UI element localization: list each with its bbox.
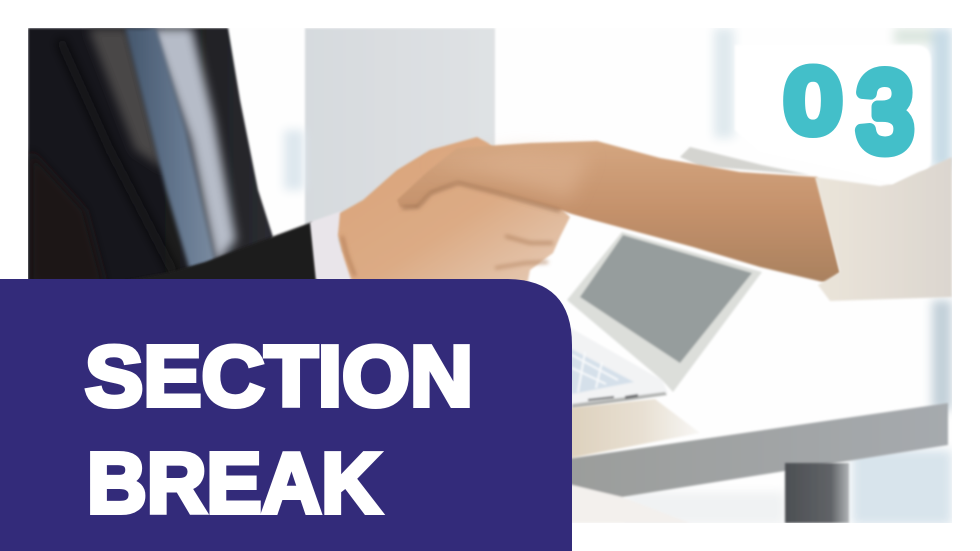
finger creases [342,236,553,276]
heading: break: BREAK [87,436,381,532]
section number 03: 3 [857,51,913,174]
suit jacket [28,28,273,285]
table leg [785,463,849,523]
hand: man [338,137,570,285]
white number backdrop [735,45,931,184]
heading: section: SECTION [85,330,473,424]
shirt and lapel shading [30,28,236,285]
background wall [305,28,495,253]
section number 03: 0 [786,51,840,150]
table top and front edge [560,399,948,523]
panel: title block [0,279,572,551]
woman's knit sleeve [815,157,952,301]
section number 03 [786,51,913,174]
shirt cuff [308,212,351,279]
arm and hand: woman [397,141,840,283]
thumb shadow [402,183,560,211]
wrist highlight [474,152,582,198]
jacket sleeve [162,220,318,279]
laptop [560,147,810,409]
necktie [125,28,216,278]
blurred window reflections [284,28,952,525]
